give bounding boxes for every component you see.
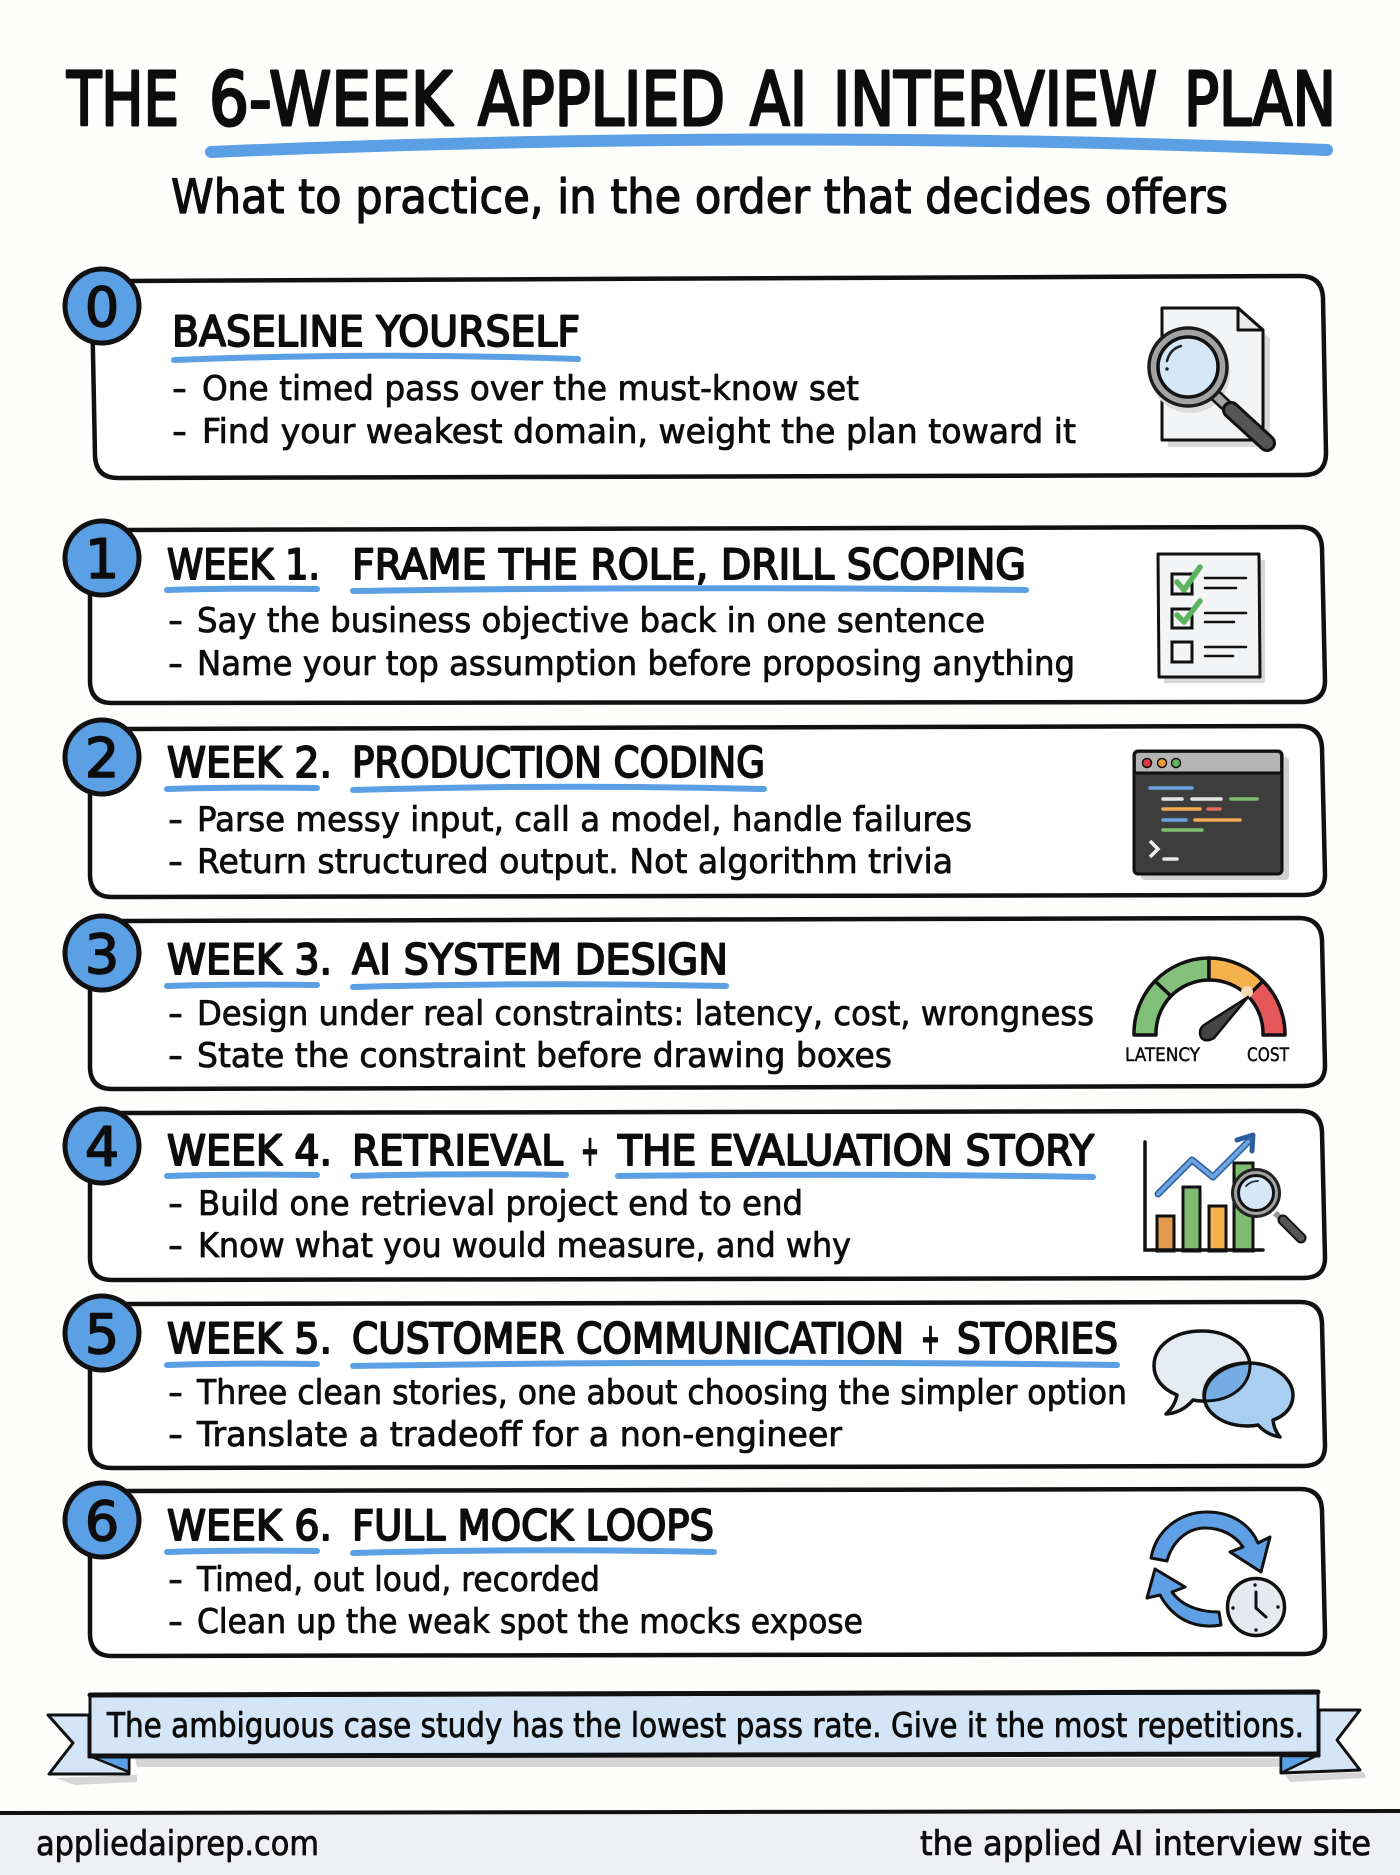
step badge 3: 3 [85,923,119,986]
heading: WEEK 4. [167,1126,332,1175]
icon: latency and cost gauge [1125,958,1289,1066]
panel: baseline yourself [65,269,1326,478]
bullets: Say the business objective back in one sentence [197,601,985,641]
heading: BASELINE YOURSELF [172,307,580,356]
step badge 5: 5 [85,1303,119,1366]
step badge 4: 4 [85,1116,119,1179]
heading: WEEK 6. [167,1501,332,1550]
right ribbon tail [1281,1710,1360,1773]
card outline [90,527,1325,703]
panel: week 2 [65,720,1325,897]
bullets: - [172,412,187,452]
bullets [168,1560,863,1642]
title [66,57,1336,143]
card outline [90,1302,1325,1468]
heading: + [581,1126,599,1175]
heading underline [167,1550,714,1553]
heading underline [167,588,1026,591]
icon: repeat arrows and clock [1147,1512,1284,1636]
bullets: - [172,369,187,409]
card outline [90,1489,1325,1656]
heading underline [167,1174,1093,1177]
footer tagline: the applied AI interview site [920,1824,1371,1864]
heading: FRAME THE ROLE, DRILL SCOPING [352,540,1026,589]
left ribbon tail [48,1715,129,1774]
icon: speech bubbles [1154,1331,1293,1437]
panel: week 1 [65,521,1325,703]
heading: WEEK 3. [167,935,332,984]
bullets: Three clean stories, one about choosing the simpler option [196,1373,1127,1413]
panel: week 6 [65,1483,1325,1656]
bullets: Design under real constraints: latency, cost, wrongness [197,994,1094,1034]
card outline [92,276,1326,478]
footer band [0,1811,1400,1875]
step badge 1 [65,521,139,595]
step badge 1: 1 [85,528,119,591]
heading: AI SYSTEM DESIGN [352,935,728,984]
icon: document with magnifier [1149,308,1270,447]
bullets: - [168,1036,183,1076]
bullets: Clean up the weak spot the mocks expose [197,1602,863,1642]
bullets: - [168,601,183,641]
heading: WEEK 2. [167,738,332,787]
banner body [90,1692,1318,1756]
bullets: Name your top assumption before proposing anything [197,644,1075,684]
step badge 6 [65,1483,139,1557]
bullets [168,800,972,882]
title: PLAN [1184,57,1336,143]
bullets: - [168,994,183,1034]
bullets [168,994,1094,1076]
title: INTERVIEW [833,57,1157,143]
bullets: Return structured output. Not algorithm trivia [197,842,953,882]
bullets: - [168,1602,183,1642]
step badge 0: 0 [85,276,119,339]
bullets: Translate a tradeoff for a non-engineer [196,1415,842,1455]
callout banner [48,1692,1366,1785]
heading: WEEK 1. [167,540,320,589]
heading underline [167,787,764,790]
step badge 4 [65,1109,139,1183]
bullets: Build one retrieval project end to end [198,1184,803,1224]
heading underline [167,1363,1117,1366]
bullets: - [168,800,183,840]
bullets [168,1184,851,1266]
title: THE [66,57,179,143]
card outline [90,1111,1325,1280]
heading underline [167,984,726,987]
panel: week 3 [65,916,1325,1089]
title: 6-WEEK [209,57,454,143]
bullets: One timed pass over the must-know set [202,369,859,409]
heading: + [921,1314,940,1363]
bullets: - [168,1560,183,1600]
bullets: - [168,1184,183,1224]
bullets: Know what you would measure, and why [198,1226,851,1266]
subtitle: What to practice, in the order that decides offers [171,170,1228,225]
bullets: - [168,644,183,684]
heading [167,1501,714,1550]
panel: week 5 [65,1296,1325,1468]
step badge 5 [65,1296,139,1370]
bullets [168,1373,1127,1455]
step badge 2 [65,720,139,794]
bullets [172,369,1076,452]
heading: CUSTOMER COMMUNICATION [352,1314,904,1363]
heading: WEEK 5. [167,1314,332,1363]
title underline [211,139,1327,152]
step badge 0 [65,269,139,343]
icon: bar chart with magnifier [1145,1135,1301,1251]
heading [167,1314,1118,1363]
footer url: appliedaiprep.com [36,1824,319,1864]
heading underline [174,356,578,360]
title: AI [750,57,807,143]
step badge 2: 2 [85,727,119,790]
card outline [90,726,1325,897]
bullets [168,601,1075,684]
heading: FULL MOCK LOOPS [352,1501,714,1550]
title: APPLIED [478,57,725,143]
footer [0,1811,1400,1875]
bullets: - [168,842,183,882]
bullets: - [168,1415,183,1455]
bullets: Find your weakest domain, weight the plan toward it [202,412,1076,452]
icon: code terminal [1134,751,1289,880]
banner shadow [55,1758,1366,1785]
bullets: - [168,1373,183,1413]
heading [167,1126,1094,1175]
heading: STORIES [957,1314,1118,1363]
icon: checklist [1158,554,1265,683]
ribbon folds [92,1756,1316,1773]
card outline [90,918,1325,1089]
panel: week 4 [65,1109,1325,1280]
heading [167,935,728,984]
heading: THE EVALUATION STORY [617,1126,1094,1175]
heading [167,738,765,787]
icon: latency and cost gauge: COST [1247,1044,1289,1066]
bullets: - [168,1226,183,1266]
heading: PRODUCTION CODING [352,738,765,787]
icon: latency and cost gauge: LATENCY [1125,1044,1200,1066]
bullets: Timed, out loud, recorded [196,1560,600,1600]
bullets: Parse messy input, call a model, handle failures [197,800,972,840]
step badge 3 [65,916,139,990]
heading: RETRIEVAL [352,1126,564,1175]
bullets: State the constraint before drawing boxes [197,1036,892,1076]
step badge 6: 6 [85,1490,119,1553]
